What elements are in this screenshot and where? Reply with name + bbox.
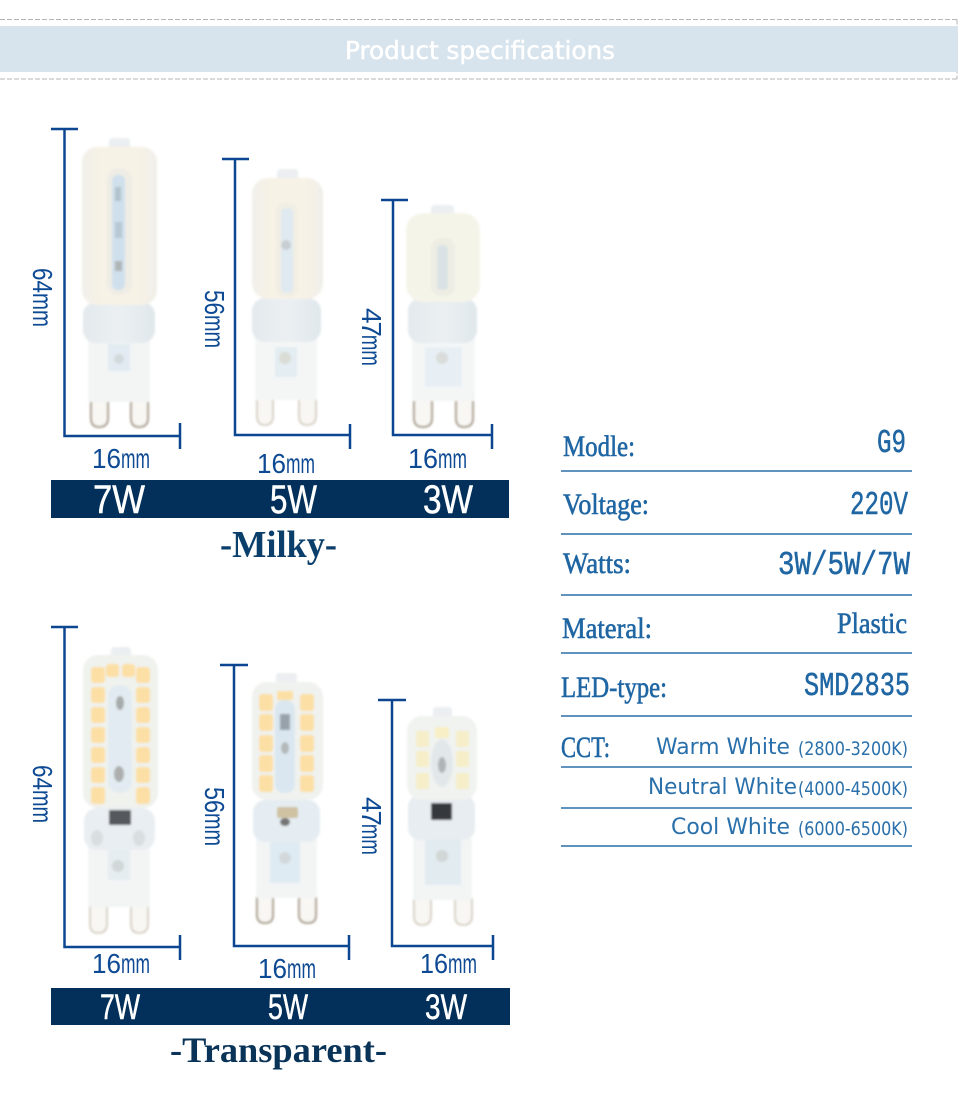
dimension: milky 3W xyxy=(356,200,492,474)
dimension: milky 5W xyxy=(199,159,350,479)
dimension: transparent 7W xyxy=(27,627,180,979)
row: CCT cool white: Cool White xyxy=(671,815,790,840)
label: 7W: 7W xyxy=(93,478,145,522)
wattage bar: transparent xyxy=(51,988,510,1027)
panel: milky bulbs xyxy=(27,129,509,566)
row: watts: 3W/5W/7W xyxy=(778,547,910,584)
caption: Milky: -Milky- xyxy=(220,524,337,566)
label: 16mm: 16mm xyxy=(258,953,316,984)
label: 64mm: 64mm xyxy=(27,765,58,823)
row: CCT warm white: (2800-3200K) xyxy=(798,738,908,760)
row: voltage: Voltage: xyxy=(563,488,649,521)
label: 16mm: 16mm xyxy=(257,448,315,479)
row: material: Plastic xyxy=(837,607,907,640)
label: 16mm: 16mm xyxy=(92,443,150,474)
row: model: Modle: xyxy=(563,430,635,463)
label: 3W: 3W xyxy=(425,988,467,1027)
row: watts: Watts: xyxy=(563,547,631,580)
label: 3W: 3W xyxy=(423,478,473,522)
panel: specification table xyxy=(561,425,912,846)
header banner xyxy=(0,20,958,79)
row: material: Materal: xyxy=(562,612,652,645)
row: CCT neutral white xyxy=(561,775,912,808)
label: 5W: 5W xyxy=(270,478,317,522)
label: 64mm: 64mm xyxy=(27,268,58,327)
row: model xyxy=(561,425,912,471)
label: 5W: 5W xyxy=(268,988,308,1027)
row: voltage xyxy=(561,487,912,534)
row: LED type: LED-type: xyxy=(561,671,667,704)
label: 16mm: 16mm xyxy=(420,948,477,979)
dimension: transparent 3W xyxy=(356,700,493,979)
wattage bar: milky xyxy=(51,478,509,522)
label: 47mm: 47mm xyxy=(356,797,387,855)
bulb: milky 5W xyxy=(252,169,323,425)
label: 16mm: 16mm xyxy=(408,443,467,474)
row: CCT neutral white: (4000-4500K) xyxy=(798,778,908,800)
bulb: milky 7W xyxy=(82,138,157,427)
caption: Transparent: -Transparent- xyxy=(170,1030,387,1070)
label: 16mm: 16mm xyxy=(92,948,150,979)
bulb: transparent 5W xyxy=(252,673,323,923)
label: 56mm: 56mm xyxy=(199,787,230,846)
row: voltage: 220V xyxy=(850,487,908,524)
dimension: transparent 5W xyxy=(199,665,349,984)
row: LED type: SMD2835 xyxy=(804,668,910,705)
row: CCT warm white xyxy=(561,731,912,767)
row: CCT cool white: (6000-6500K) xyxy=(798,818,908,840)
bulb: transparent 3W xyxy=(407,707,477,925)
row: LED type xyxy=(561,668,912,716)
bulb: milky 3W xyxy=(406,205,480,427)
row: watts xyxy=(561,547,912,595)
row: CCT neutral white: Neutral White xyxy=(648,775,797,800)
label: 7W: 7W xyxy=(100,988,140,1027)
label: 56mm: 56mm xyxy=(199,290,230,348)
row: material xyxy=(561,607,912,653)
row: CCT warm white: CCT: xyxy=(561,731,610,764)
bulb: transparent 7W xyxy=(83,647,158,933)
title: Product specifications xyxy=(345,36,615,65)
panel: transparent bulbs xyxy=(27,627,510,1070)
label: 47mm: 47mm xyxy=(356,308,387,366)
dimension: milky 7W xyxy=(27,129,180,474)
row: CCT cool white xyxy=(561,815,912,846)
row: model: G9 xyxy=(877,425,906,462)
row: CCT warm white: Warm White xyxy=(656,735,790,760)
